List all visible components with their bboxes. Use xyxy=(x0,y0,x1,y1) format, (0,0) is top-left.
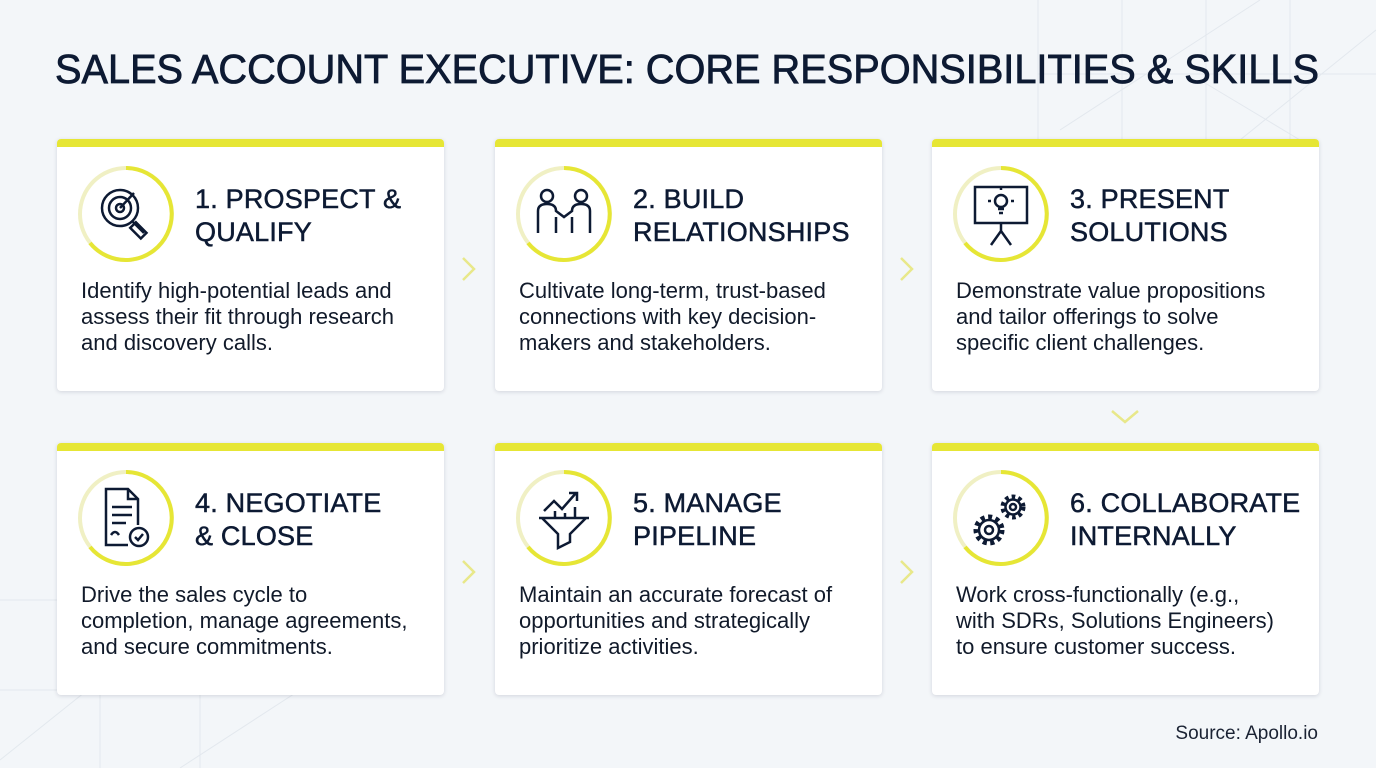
panel: 4 negotiate xyxy=(57,443,444,695)
panel: 5 pipeline xyxy=(495,443,882,695)
heading: 2. BUILD xyxy=(633,184,744,214)
heading: 1. PROSPECT & xyxy=(195,184,401,214)
text xyxy=(81,582,408,659)
text xyxy=(956,278,1265,355)
heading xyxy=(633,184,850,247)
text xyxy=(519,582,832,659)
text xyxy=(519,278,826,355)
text: Maintain an accurate forecast of xyxy=(519,582,832,607)
heading: QUALIFY xyxy=(195,217,312,247)
icon: target magnifier xyxy=(78,166,174,262)
heading xyxy=(633,488,782,551)
panel: 3 present xyxy=(932,139,1319,391)
heading xyxy=(195,488,381,551)
arrow xyxy=(462,257,476,281)
heading xyxy=(1070,184,1230,247)
heading: PIPELINE xyxy=(633,521,756,551)
title: SALES ACCOUNT EXECUTIVE: CORE RESPONSIBILITIES & SKILLS xyxy=(55,46,1319,92)
heading xyxy=(195,184,401,247)
heading: & CLOSE xyxy=(195,521,313,551)
icon: funnel chart xyxy=(516,470,612,566)
text: Drive the sales cycle to xyxy=(81,582,307,607)
heading: 5. MANAGE xyxy=(633,488,782,518)
text: makers and stakeholders. xyxy=(519,330,771,355)
icon: handshake xyxy=(516,166,612,262)
text: opportunities and strategically xyxy=(519,608,810,633)
heading: 4. NEGOTIATE xyxy=(195,488,381,518)
icon: document check xyxy=(78,470,174,566)
text: and discovery calls. xyxy=(81,330,273,355)
text: specific client challenges. xyxy=(956,330,1204,355)
heading xyxy=(1070,488,1300,551)
heading: 3. PRESENT xyxy=(1070,184,1230,214)
text: prioritize activities. xyxy=(519,634,699,659)
panel: 2 build xyxy=(495,139,882,391)
text: Cultivate long-term, trust-based xyxy=(519,278,826,303)
heading: INTERNALLY xyxy=(1070,521,1237,551)
text: assess their fit through research xyxy=(81,304,394,329)
text: with SDRs, Solutions Engineers) xyxy=(956,608,1274,633)
arrow xyxy=(900,257,914,281)
text: and tailor offerings to solve xyxy=(956,304,1219,329)
text xyxy=(81,278,394,355)
text: connections with key decision- xyxy=(519,304,816,329)
text: to ensure customer success. xyxy=(956,634,1236,659)
heading: 6. COLLABORATE xyxy=(1070,488,1300,518)
arrow xyxy=(462,560,476,584)
text: Demonstrate value propositions xyxy=(956,278,1265,303)
icon: presentation xyxy=(953,166,1049,262)
panel: 6 collaborate xyxy=(932,443,1319,695)
text xyxy=(956,582,1274,659)
text: completion, manage agreements, xyxy=(81,608,408,633)
arrow xyxy=(900,560,914,584)
icon: gears xyxy=(953,470,1049,566)
heading: RELATIONSHIPS xyxy=(633,217,850,247)
text: Work cross-functionally (e.g., xyxy=(956,582,1239,607)
text: and secure commitments. xyxy=(81,634,333,659)
text: Identify high-potential leads and xyxy=(81,278,392,303)
panel: 1 prospect xyxy=(57,139,444,391)
heading: SOLUTIONS xyxy=(1070,217,1228,247)
arrow: down xyxy=(1111,410,1139,424)
source: Source: Apollo.io xyxy=(1175,723,1318,744)
